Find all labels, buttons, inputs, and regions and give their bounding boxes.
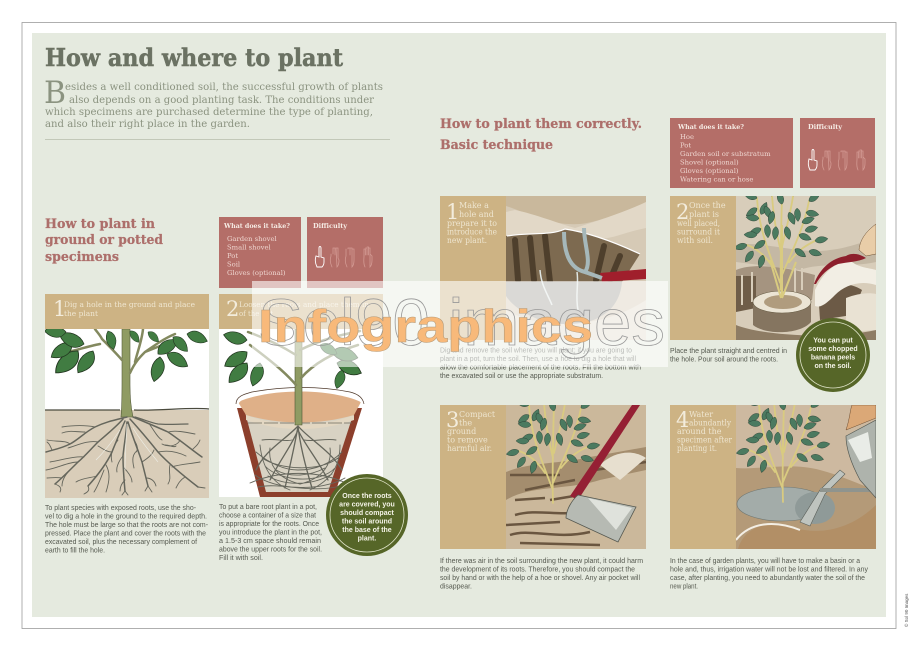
callout: compact the soil: the base of the [342,527,392,534]
step 1 text, left [45,505,208,554]
step 3 card, right: Compact [459,410,496,419]
intro text block: B [44,75,66,111]
watermark: Sol90 Images Infographics: Infographics [258,300,593,352]
heading: how to plant in ground or potted specimens: specimens [45,250,119,265]
step 2 card, right: plant is [689,210,719,219]
step 2 text, left: you introduce the plant in the pot, [219,530,322,536]
credit: © Sol 90 Images [903,593,909,627]
step 2 card, right: 2 [676,200,689,224]
step 2 card, right: surround it [677,228,721,236]
heading: how to plant them correctly [440,117,642,153]
step 3 card, right: harmful air. [447,444,492,453]
step 2 text, right: the hole. Pour soil around the roots. [670,356,778,364]
callout: banana peels: banana peels [811,354,855,362]
callout: compact the soil: plant. [358,536,376,542]
step 1 text, left: The hole must be large so that the roots are not com- [45,522,208,529]
step 2 card, right: well placed, [677,219,720,228]
step 3 card, right: 3 [446,408,459,432]
step 3 card, right: ground [447,427,476,436]
step 4 card, right: abundantly [689,418,731,428]
step 1 card, right: prepare it to [447,219,497,228]
illustration: plant in a pot [219,329,383,497]
step 2 text, left: choose a container of a size that [219,512,316,520]
panel: difficulty, left: Difficulty [313,222,347,230]
step 2 text, left: is appropriate for the roots. Once [219,521,319,528]
step 2 card, right [670,196,736,340]
panel: what does it take, right: Garden soil or substratum [680,150,771,158]
step 1 text, left: earth to fill the hole. [45,548,105,554]
panel: what does it take, right: Pot [680,142,691,150]
step 3 text, right: disappear. [440,584,472,590]
panel: what does it take, right: Shovel (optional) [680,158,739,166]
title: How and where to plant [45,43,343,72]
step 1 banner, left: the plant [64,309,98,318]
callout: compact the soil: Once the roots [342,493,392,500]
step 4 card, right [670,405,736,549]
panel: what does it take, left: What does it take? [223,222,290,230]
step 3 card, right: the [459,418,472,428]
panel: what does it take, left [219,217,301,288]
step 4 text, right: In the case of garden plants, you will have to make a basin or a [670,558,860,565]
step 2 text, left: Fill it with soil. [219,555,263,562]
step 2 card, right: Once the [689,201,726,210]
callout: compact the soil: are covered, you [339,502,395,508]
intro text block [44,75,383,130]
step 1 text, right: allow the comfortable placement of the roots. Fill the bottom with [440,364,641,372]
intro text block: also depends on a good planting task. The conditions under [69,95,374,106]
step 1 text, left: excavated soil, plus the necessary complement of [45,539,197,546]
panel: difficulty, left [307,217,383,288]
step 1 text, right: the excavated soil or use the appropriate substratum. [440,373,603,380]
callout: banana peels: some chopped [808,346,858,353]
step 1 card, right: 1 [446,200,459,224]
intro text block: and also their right place in the garden. [45,119,250,130]
panel: what does it take, left: Soil [227,260,240,268]
step 1 card, right: Make a [459,201,489,210]
heading: how to plant them correctly: How to plant them correctly. [440,117,642,132]
illustration: watering the plant [736,405,876,549]
step 2 text, right [670,348,787,364]
step 2 banner, left: of the pot [239,309,273,318]
step 1 text, right [440,348,641,380]
panel: what does it take, left: Gloves (optional) [227,269,286,277]
heading: how to plant them correctly: Basic technique [440,138,553,153]
step 4 text, right: hole and, thus, irrigation water will not be lost and filtered. In any [670,566,869,574]
step 1 text, left: To plant species with exposed roots, use the sho- [45,505,196,512]
intro text block: esides a well conditioned soil, the successful growth of plants [65,82,383,93]
step 1 banner, left [45,294,209,329]
callout: compact the soil: the soil around [342,518,392,526]
heading: how to plant in ground or potted specimens: How to plant in [45,217,156,232]
step 4 card, right: planting it. [677,444,717,453]
step 2 text, left: a 1.5-3 cm space should remain [219,538,321,545]
panel: what does it take, right [670,118,793,188]
step 2 banner, left [219,294,383,329]
panel: difficulty, right: Difficulty [808,123,842,131]
step 1 text, right: plant in a pot, turn the soil. Then, use a hoe to dig a hole that will [440,356,636,363]
callout: compact the soil [326,474,408,556]
step 3 text, right: If there was air in the soil surrounding the new plant, it could harm [440,558,643,565]
panel: difficulty, right [800,118,875,188]
step 4 card, right: 4 [676,408,689,432]
step 3 text, right: the development of its roots. Therefore, you should compact the [440,566,635,574]
heading: how to plant in ground or potted specimens: ground or potted [45,233,163,248]
heading: how to plant in ground or potted specimens [45,217,163,265]
illustration: sapling with root ball and trowel [736,196,876,340]
step 4 text, right: new plant. [670,584,698,590]
step 2 text, left [219,504,322,562]
step 1 card, right: hole and [459,210,494,219]
step 3 text, right [440,558,643,590]
step 2 text, left: above the upper roots for the soil. [219,546,322,554]
panel: what does it take, right: Watering can or hose [680,176,753,184]
step 1 card, right: new plant. [447,236,487,245]
panel: what does it take, right: Hoe [680,133,694,141]
intro text block: which specimens are purchased determine the type of planting, [45,107,373,118]
step 3 card, right: to remove [447,436,488,444]
step 3 card, right [440,405,506,549]
callout: compact the soil: should compact [340,510,394,517]
callout: banana peels: You can put [813,338,853,344]
callout: banana peels [796,318,870,392]
step 4 text, right [670,558,869,590]
panel: what does it take, right: What does it take? [677,123,744,131]
step 2 banner, left: 2 [226,297,239,321]
step 1 banner, left: Dig a hole in the ground and place [64,300,195,309]
step 1 text, left: vel to dig a hole in the ground to the required depth. [45,514,207,520]
callout: banana peels: on the soil. [815,363,852,370]
panel: what does it take, right: Gloves (optional) [680,167,739,175]
step 1 text, right: Dig and remove the soil where you will plant; if you are going to [440,348,632,354]
step 2 card, right: with soil. [677,236,713,245]
panel: what does it take, left: Small shovel [227,244,271,252]
step 2 text, left: To put a bare root plant in a pot, [219,504,317,511]
step 4 card, right: around the [677,427,722,436]
step 1 card, right [440,196,506,340]
illustration: compacting soil with a hoe [506,390,646,549]
step 2 banner, left: Loosen the roots and place them in [239,300,369,309]
step 3 text, right: soil by hand or with the help of a hoe or shovel. Any air pocket will [440,575,640,582]
step 4 card, right: specimen after [677,436,732,444]
step 4 text, right: case, after planting, you need to abundantly water the soil of the [670,575,865,582]
step 1 card, right: introduce the [447,228,497,236]
step 1 text, left: pressed. Place the plant and cover the roots with the [45,530,206,538]
panel: what does it take, left: Garden shovel [227,235,277,243]
watermark: Sol90 Images Infographics: Sol90 images [258,285,665,359]
step 2 text, right: Place the plant straight and centred in [670,348,787,355]
step 1 banner, left: 1 [53,297,66,321]
step 4 card, right: Water [689,410,713,419]
panel: what does it take, left: Pot [227,252,238,260]
illustration: hole with hand fork [506,196,646,324]
illustration: tree with roots in the ground [44,326,209,498]
